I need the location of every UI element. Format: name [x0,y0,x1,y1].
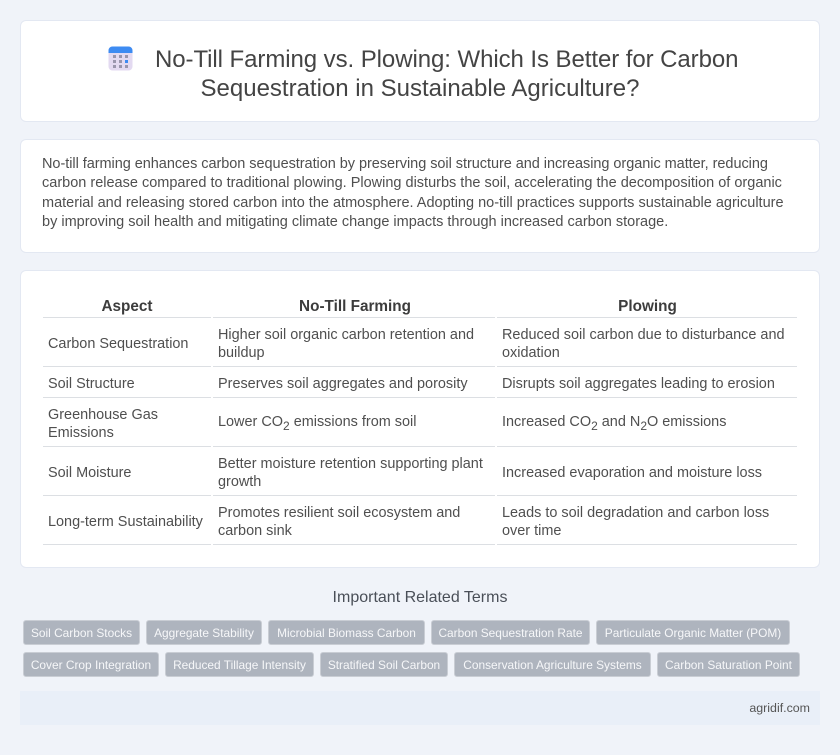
tag [23,620,140,645]
tag: Cover Crop Integration [31,658,151,672]
tags: related terms [23,620,800,677]
row: soil structure: Preserves soil aggregates and porosity [218,376,468,392]
row: carbon sequestration: Higher soil organic carbon retention and [218,327,474,343]
tag [596,620,790,645]
row: greenhouse gas emissions [48,407,726,441]
tag: Aggregate Stability [154,626,254,640]
title [155,46,738,102]
tag: Carbon Sequestration Rate [438,626,583,640]
text block: introduction: material and releasing stored carbon into the atmosphere. Adopting no-till practices supports sustainable agriculture [42,195,784,211]
tag [431,620,590,645]
row: greenhouse gas emissions: Greenhouse Gas [48,407,158,423]
tag [146,620,262,645]
row: long-term sustainability [48,505,769,539]
table header: No-Till Farming [299,298,411,315]
row: soil moisture: growth [218,474,261,490]
row: long-term sustainability: carbon sink [218,523,292,539]
text block: introduction: by improving soil health and mitigating climate change impacts through increased carbon storage. [42,214,668,230]
row: long-term sustainability: Long-term Sustainability [48,514,203,530]
row: soil structure: Soil Structure [48,376,135,392]
row: soil moisture: Increased evaporation and moisture loss [502,465,762,481]
row: carbon sequestration: Reduced soil carbon due to disturbance and [502,327,785,343]
row: soil moisture: Soil Moisture [48,465,131,481]
text block: introduction [42,156,784,230]
row: greenhouse gas emissions: Increased CO2 and N2O emissions [502,414,726,433]
row: soil moisture [48,456,762,490]
tag: Stratified Soil Carbon [328,658,440,672]
footer bar [20,691,820,725]
row: long-term sustainability: Leads to soil degradation and carbon loss [502,505,769,521]
panel: introduction [20,139,820,253]
tag: Microbial Biomass Carbon [277,626,416,640]
tag [657,652,800,677]
title: Sequestration in Sustainable Agriculture? [201,75,639,102]
row: long-term sustainability: Promotes resilient soil ecosystem and [218,505,460,521]
tag [23,652,159,677]
row: carbon sequestration: Carbon Sequestration [48,336,188,352]
text block: introduction: carbon release compared to traditional plowing. Plowing disturbs the soil, accelerating the decomposition of organic [42,175,782,191]
table header: Aspect [101,298,152,315]
tag: Carbon Saturation Point [665,658,792,672]
tag [454,652,651,677]
heading: important related terms: Important Related Terms [333,589,507,606]
row: soil moisture: Better moisture retention supporting plant [218,456,483,472]
tag: Conservation Agriculture Systems [463,658,642,672]
tag: Reduced Tillage Intensity [173,658,306,672]
table header: Plowing [618,298,677,315]
row: greenhouse gas emissions: Lower CO2 emissions from soil [218,414,416,433]
tag [268,620,425,645]
footer text: agridif.com [749,701,810,715]
row: soil structure [48,376,775,392]
title: No-Till Farming vs. Plowing: Which Is Better for Carbon [155,46,738,73]
row: carbon sequestration [48,327,785,361]
row: long-term sustainability: over time [502,523,561,539]
text block: introduction: No-till farming enhances carbon sequestration by preserving soil structure and increasing organic matter, reducing [42,156,768,172]
table header [101,298,677,315]
row: carbon sequestration: oxidation [502,345,560,361]
tag: Particulate Organic Matter (POM) [605,626,781,640]
panel: comparison table [20,270,820,568]
icon: calendar [108,46,132,70]
row: carbon sequestration: buildup [218,345,265,361]
row: greenhouse gas emissions: Emissions [48,425,114,441]
panel: title card [20,20,820,122]
tag [165,652,314,677]
tag [320,652,448,677]
tag: Soil Carbon Stocks [31,626,132,640]
row: soil structure: Disrupts soil aggregates leading to erosion [502,376,775,392]
